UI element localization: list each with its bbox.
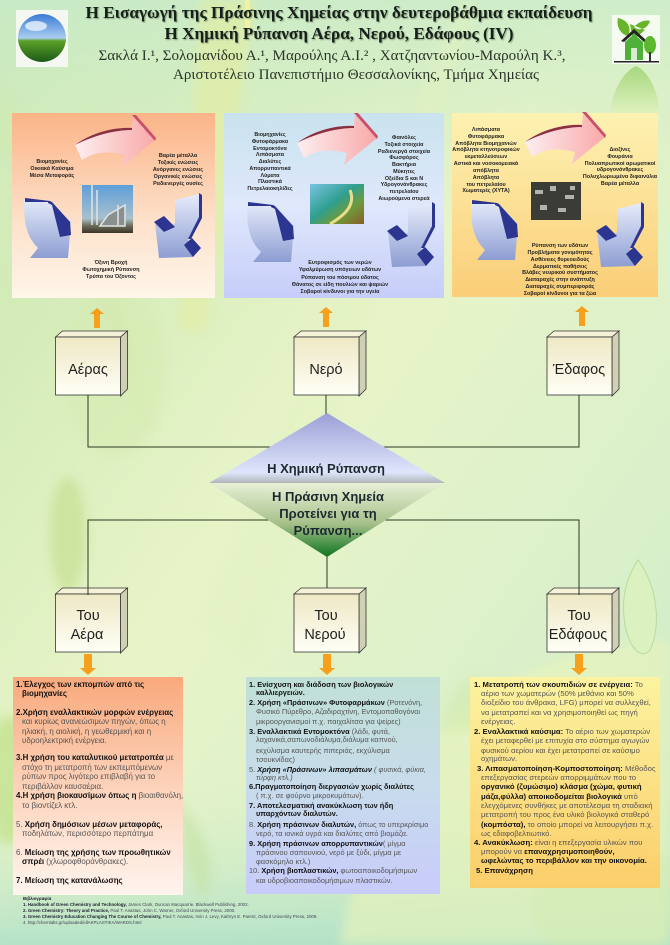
panel: soil pollution cycle: Απόβλητα bbox=[473, 175, 500, 181]
box: of the air bbox=[56, 588, 128, 653]
box: air: Αέρας bbox=[68, 362, 108, 378]
panel: water pollution cycle: Τοξικά στοιχεία bbox=[385, 142, 424, 148]
panel: air pollution cycle: Φωτοχημική Ρύπανση bbox=[82, 267, 140, 273]
panel: air pollution cycle: Μέσα Μεταφοράς bbox=[30, 173, 75, 179]
panel: water pollution cycle: Λύματα bbox=[261, 173, 280, 179]
panel: soil pollution cycle bbox=[452, 112, 658, 297]
panel: air solutions: ηλιακή, η αιολική, η γεωθερμική και η bbox=[22, 727, 151, 736]
panel: water solutions: υπαρχόντων διαλυτών. bbox=[256, 809, 338, 818]
arrow: air up bbox=[90, 308, 104, 328]
box: of the air: Αέρα bbox=[71, 627, 103, 643]
panel: water solutions: 6.Πραγματοποίηση διεργασιών χωρίς διαλύτες bbox=[249, 782, 414, 791]
references: 3. Green Chemistry Education Changing The Course of Chemistry, Paul T. Anastas, Irvin J. Levy, Kathryn E. Parent, Oxford University Press, 2009. bbox=[23, 914, 318, 919]
panel: water pollution cycle: Πετρελαιοκηλίδες bbox=[247, 186, 293, 192]
panel: water pollution cycle bbox=[224, 113, 444, 298]
panel: water solutions: 10. Χρήση βιοπλαστικών, φωτοαποικοδομήσιμων bbox=[249, 866, 417, 875]
diamond: chemical pollution and green chemistry: Η Πράσινη Χημεία bbox=[272, 489, 384, 504]
panel: water pollution cycle: Υφαλμύρωση υπόγειων υδάτων bbox=[299, 267, 381, 273]
panel: air solutions: περιβάλλον καυσαέρια. bbox=[22, 782, 103, 791]
panel: soil solutions bbox=[470, 677, 660, 888]
panel: air pollution cycle: Ανόργανες ενώσεις bbox=[153, 167, 203, 173]
icon: green house logo bbox=[612, 15, 660, 64]
panel: soil pollution cycle: Βαρέα μέταλλα bbox=[601, 181, 640, 187]
panel: soil solutions: έχει μεταφερθεί με επιτυχία στο σύστημα αγωγών bbox=[481, 736, 650, 745]
panel: water solutions bbox=[246, 677, 440, 894]
panel: soil pollution cycle: Διοξίνες bbox=[610, 147, 631, 153]
panel: soil solutions: (κομπόστα), το οποίο μπορεί να λειτουργήσει π.χ. bbox=[481, 820, 653, 829]
panel: soil solutions: ωφελώντας το περιβάλλον και την οικονομία. bbox=[481, 856, 647, 865]
panel: water solutions: φασκόμηλο κτλ.) bbox=[256, 857, 310, 866]
panel: soil pollution cycle: Ρύπανση των υδάτων bbox=[532, 243, 588, 249]
panel: water solutions: 1. Ενίσχυση και διάδοση των βιολογικών bbox=[249, 680, 393, 689]
authors and affiliation bbox=[98, 48, 566, 83]
panel: air pollution cycle bbox=[12, 113, 215, 298]
authors and affiliation: Σακλά Ι.¹, Σολομανίδου Α.¹, Μαρούλης Α.Ι.² , Χατζηαντωνίου-Μαρούλη Κ.³, bbox=[98, 48, 566, 64]
panel: soil solutions: ελεγχόμενες συνθήκες με αποτέλεσμα τη σταδιακή bbox=[481, 801, 652, 810]
panel: water solutions: 3. Εναλλακτικά Εντομοκτόνα (λάδι, φυτά, bbox=[249, 727, 390, 736]
panel: soil solutions: 5. Επανάχρηση bbox=[476, 866, 533, 875]
panel: water pollution cycle: Πλαστικά bbox=[258, 179, 283, 185]
panel: air solutions: στόχο τη μετατροπή των εκπεμπόμενων bbox=[22, 763, 162, 772]
panel: soil solutions: ενέργειας. bbox=[481, 717, 515, 726]
panel: soil solutions: μετατροπή του προς ένα υλικό βιολογικά σταθερό bbox=[481, 810, 649, 819]
connector lines bbox=[88, 395, 579, 595]
panel: soil pollution cycle: Απόβλητα Βιομηχανιών bbox=[455, 141, 517, 147]
panel: water pollution cycle: Ρύπανση του πόσιμου ύδατος bbox=[301, 275, 379, 281]
panel: soil pollution cycle: του πετρελαίου bbox=[466, 182, 506, 188]
authors and affiliation: Αριστοτέλειο Πανεπιστήμιο Θεσσαλονίκης, Τμήμα Χημείας bbox=[173, 67, 539, 83]
panel: soil pollution cycle: Απόβλητα κτηνοτροφικών bbox=[452, 147, 520, 153]
panel: air solutions: 6. Μείωση της χρήσης των προωθητικών bbox=[16, 848, 171, 857]
panel: water pollution cycle: Θάνατος σε είδη πουλιών και ψαριών bbox=[292, 282, 388, 288]
box: of the soil bbox=[547, 588, 619, 653]
panel: water pollution cycle: Υδρογονάνθρακες bbox=[381, 182, 428, 188]
panel: soil pollution cycle: Λιπάσματα bbox=[472, 127, 501, 133]
panel: water pollution cycle: Ραδιενεργά στοιχεία bbox=[378, 149, 431, 155]
panel: water pollution cycle: Απορρυπαντικά bbox=[249, 166, 291, 172]
panel: soil pollution cycle: Διαταραχές συμπεριφοράς bbox=[526, 284, 595, 290]
box: of the soil: Εδάφους bbox=[549, 627, 607, 643]
box: of the water: Νερού bbox=[304, 627, 346, 643]
arrow: soil down bbox=[571, 654, 587, 675]
references: 1. Handbook of Green Chemistry and Technology, James Clark, Duncan Macquarrie, Blackwell Publishing, 2002. bbox=[23, 902, 249, 907]
panel: water solutions: εκχύλισμα καυτερής πιπεριάς, εκχύλισμα bbox=[256, 746, 390, 755]
panel: soil pollution cycle: Σοβαροί κίνδυνοι για τα ζώα bbox=[524, 291, 597, 297]
diamond: chemical pollution and green chemistry: Ρύπανση... bbox=[294, 523, 362, 538]
panel: air solutions: 1.Έλεγχος των εκπομπών από τις bbox=[16, 680, 144, 689]
box: soil bbox=[547, 331, 619, 396]
panel: soil solutions: φυσικού αερίου και έχει μετατραπεί σε καύσιμο bbox=[481, 746, 640, 755]
panel: water pollution cycle: Οξείδια S και N bbox=[385, 176, 423, 182]
panel: water pollution cycle: Εντομοκτόνα bbox=[253, 146, 288, 152]
panel: air solutions: ποδηλάτων, περισσότερο περπάτημα bbox=[22, 829, 154, 838]
panel: air solutions: ρύπων προς λιγότερο επιβλαβή για το bbox=[22, 772, 156, 781]
panel: water solutions: λαχανικά,σαπωνοδιάλυμα,διάλυμα καπνού, bbox=[256, 735, 398, 744]
panel: water solutions: νερό, τα ιονικά υγρά και διαλύτες από βιομάζα. bbox=[256, 829, 408, 838]
panel: soil pollution cycle: Φυτοφάρμακα bbox=[468, 134, 505, 140]
panel: water solutions: μικροοργανισμοί π.χ. παιχαλίτσα για ψείρες) bbox=[256, 717, 401, 726]
panel: soil solutions: 1. Μετατροπή των σκουπιδιών σε ενέργεια: Το bbox=[474, 680, 643, 689]
panel: water solutions: 5. Χρήση «Πράσινων» λιπασμάτων ( φυσικά, φύκια, bbox=[249, 765, 426, 774]
panel: soil solutions: μπορούν να επαναχρησιμοποιηθούν, bbox=[481, 847, 615, 856]
references: 2. Green Chemistry: Theory and Practice, Paul T. Anastas, John C. Warner, Oxford University Press, 2000. bbox=[23, 908, 235, 913]
panel: soil solutions: 3. Λιπασματοποίηση-Κομποστοποίηση: Μέθοδος bbox=[477, 764, 656, 773]
panel: air pollution cycle: Όξινη Βροχή bbox=[94, 260, 127, 266]
panel: soil solutions: ως εδαφοβελτιωτικό. bbox=[481, 829, 552, 838]
box: air bbox=[56, 331, 128, 396]
box: soil: Έδαφος bbox=[552, 362, 605, 378]
panel: soil pollution cycle: απόβλητα bbox=[473, 168, 500, 174]
box: water: Νερό bbox=[309, 362, 343, 378]
panel: water pollution cycle: Μύκητες bbox=[393, 169, 415, 175]
panel: soil pollution cycle: Δερματικές παθήσεις bbox=[533, 264, 587, 270]
box: of the water bbox=[294, 588, 366, 653]
panel: soil solutions: 4. Ανακύκλωση: είναι η επεξεργασία υλικών που bbox=[474, 838, 642, 847]
panel: air solutions: βιομηχανίες bbox=[22, 689, 67, 698]
panel: water pollution cycle: Φωσφόρος bbox=[389, 155, 419, 161]
panel: soil solutions: μάζα,φύλλα) αποικοδομείται βιολογικά υπό bbox=[481, 792, 638, 801]
panel: air solutions bbox=[13, 677, 183, 895]
panel: air solutions: 3.Η χρήση του καταλυτικού μετατροπέα με bbox=[16, 753, 174, 762]
box: water bbox=[294, 331, 366, 396]
panel: water pollution cycle: Ευτροφισμός των νερών bbox=[308, 260, 372, 266]
panel: air solutions: σπρέι (χλωροφθοράνθρακες). bbox=[22, 857, 128, 866]
panel: water pollution cycle: Βακτήρια bbox=[392, 162, 417, 168]
panel: water solutions: Φυσικό Πύρεθρο, Αζαδιραχτίνη, Εντομοπαθογόνοι bbox=[256, 707, 420, 716]
panel: water pollution cycle: Διαλύτες bbox=[259, 159, 281, 165]
panel: air pollution cycle: Οργανικές ενώσεις bbox=[154, 174, 203, 180]
panel: soil solutions: επεξεργασίας στερεών απορριμμάτων που το bbox=[481, 773, 636, 782]
panel: soil pollution cycle: Διαταραχές στην ανάπτυξη bbox=[525, 277, 595, 283]
panel: water pollution cycle: Βιομηχανίες bbox=[254, 132, 286, 138]
panel: soil pollution cycle: Φουράνια bbox=[607, 154, 633, 160]
panel: water solutions: ( π.χ. σε φούρνο μικροκυμάτων). bbox=[256, 791, 364, 800]
box: of the water: Του bbox=[314, 608, 338, 624]
panel: water pollution cycle: Αιωρούμενα στερεά bbox=[378, 196, 430, 202]
panel: soil pollution cycle: Πολυχλωριωμένα διφαινύλια bbox=[583, 174, 658, 180]
panel: soil pollution cycle: εκμεταλλεύσεων bbox=[465, 154, 507, 160]
panel: soil solutions: να μετατραπεί και να χρησιμοποιηθεί ως πηγή bbox=[481, 708, 638, 717]
arrow: water down bbox=[319, 654, 335, 675]
panel: air solutions: 2.Χρήση εναλλακτικών μορφών ενέργειας bbox=[16, 708, 173, 717]
panel: soil pollution cycle: Χωματερές (ΧΥΤΑ) bbox=[462, 188, 510, 194]
panel: air solutions: το βιοντίζελ κτλ. bbox=[22, 801, 77, 810]
panel: air solutions: 4.Η χρήση βιοκαυσίμων όπως η βιοαιθανόλη, bbox=[16, 791, 183, 800]
panel: soil solutions: αέριο των χωματερών (50% μεθάνιο και 50% bbox=[481, 689, 634, 698]
icon: earth globe logo bbox=[16, 10, 68, 67]
panel: water solutions: 2. Χρήση «Πράσινων» Φυτοφαρμάκων (Ροτενόνη, bbox=[249, 698, 422, 707]
arrow: soil up bbox=[575, 306, 589, 326]
panel: water pollution cycle: Φυτοφάρμακα bbox=[252, 139, 289, 145]
title: Η Εισαγωγή της Πράσινης Χημείας στην δευτεροβάθμια εκπαίδευση bbox=[86, 3, 592, 22]
panel: soil solutions: διοξείδιο του άνθρακα, LFG) μπορεί να συλλεχθεί, bbox=[481, 698, 651, 707]
panel: soil solutions: οχημάτων. bbox=[481, 754, 517, 763]
title bbox=[86, 3, 592, 43]
panel: air solutions: 7. Μείωση της κατανάλωσης bbox=[16, 876, 123, 885]
references: 4. http://chemlabs.gr/uploaded/ellAKPLASTIKA/WARDS.html bbox=[23, 920, 141, 925]
diamond: chemical pollution and green chemistry bbox=[209, 413, 445, 557]
panel: air pollution cycle: Βαρέα μέταλλα bbox=[159, 153, 198, 159]
box: of the soil: Του bbox=[567, 608, 591, 624]
panel: water solutions: 9. Χρήση πράσινων απορρυπαντικών( μίγμα bbox=[249, 839, 406, 848]
panel: water pollution cycle: Λιπάσματα bbox=[256, 152, 285, 158]
panel: air pollution cycle: Τρύπα του Όζοντος bbox=[86, 274, 136, 280]
panel: soil solutions: 2. Εναλλακτικά καύσιμα: Το αέριο των χωματερών bbox=[474, 727, 650, 736]
references: Βιβλιογραφία bbox=[23, 896, 52, 901]
panel: water solutions: τσουκνίδας) bbox=[256, 755, 295, 764]
panel: water solutions: και υδροβιοαποικοδομήσιμων πλαστικών. bbox=[256, 876, 393, 885]
panel: air pollution cycle: Βιομηχανίες bbox=[36, 159, 68, 165]
diamond: chemical pollution and green chemistry: Προτείνει για τη bbox=[279, 506, 377, 521]
panel: soil pollution cycle: υδρογονάνθρακες bbox=[597, 167, 643, 173]
panel: soil solutions: οργανικό (ζυμώσιμο) κλάσμα (χώμα, φυτική bbox=[481, 782, 642, 791]
box: of the air: Του bbox=[76, 608, 100, 624]
diamond: chemical pollution and green chemistry: Η Χημική Ρύπανση bbox=[267, 461, 385, 476]
panel: water pollution cycle: Σοβαροί κίνδυνοι για την υγεία bbox=[301, 289, 380, 295]
panel: soil pollution cycle: Πολυαπρωτικοί αρωματικοί bbox=[585, 161, 656, 167]
references bbox=[23, 896, 318, 925]
panel: water solutions: 8. Χρήση πράσινων διαλυτών, όπως το υπερκρίσιμο bbox=[249, 820, 428, 829]
panel: soil pollution cycle: Αστικά και νοσοκομειακά bbox=[454, 161, 519, 167]
panel: air pollution cycle: Τοξικές ενώσεις bbox=[158, 160, 198, 166]
panel: water pollution cycle: Φαινόλες bbox=[392, 135, 416, 141]
panel: water solutions: πράσινου σαπουνιού, νερό με ξύδι, μίγμα με bbox=[256, 848, 402, 857]
panel: water solutions: τύρφη κτλ.) bbox=[256, 773, 293, 782]
panel: air pollution cycle: Οικιακά Καύσιμα bbox=[30, 166, 74, 172]
panel: soil pollution cycle: Βλάβες νευρικού συστήματος bbox=[522, 270, 598, 276]
panel: water solutions: 7. Αποτελεσματική ανακύκλωση των ήδη bbox=[249, 801, 394, 810]
panel: soil pollution cycle: Προβλήματα γονιμότητας bbox=[527, 250, 593, 256]
panel: air solutions: και κυρίως ανανεώσιμων πηγών, όπως η bbox=[22, 717, 166, 726]
panel: air solutions: 5. Χρήση δημόσιων μέσων μεταφοράς, bbox=[16, 820, 162, 829]
panel: water solutions: καλλιεργειών. bbox=[256, 688, 305, 697]
panel: soil pollution cycle: Ασθένειες θυρεοειδούς bbox=[531, 257, 590, 263]
panel: air pollution cycle: Ραδιενεργές ουσίες bbox=[153, 181, 203, 187]
arrow: air down bbox=[80, 654, 96, 675]
panel: water pollution cycle: πετρελαίου bbox=[389, 189, 419, 195]
panel: air solutions: υδροηλεκτρική ενέργεια. bbox=[22, 736, 107, 745]
arrow: water up bbox=[319, 307, 333, 327]
title: Η Χημική Ρύπανση Αέρα, Νερού, Εδάφους (ΙV) bbox=[164, 24, 514, 43]
